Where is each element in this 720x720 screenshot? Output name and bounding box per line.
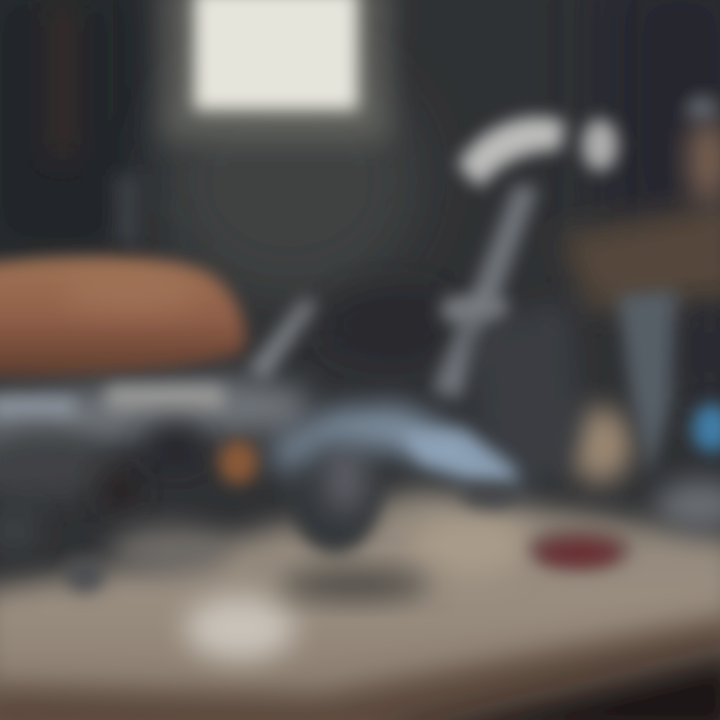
tall tool with white head: [432, 117, 618, 400]
tools pile left: [0, 297, 316, 593]
small red tray: [528, 526, 632, 570]
blue object at right edge: [655, 404, 720, 529]
blue tool handles: [270, 405, 525, 509]
central round object: [280, 426, 430, 601]
bread loaf: [0, 256, 246, 377]
table surface: [0, 407, 720, 720]
window light: [160, 0, 390, 140]
dark tool cluster right: [470, 96, 720, 490]
